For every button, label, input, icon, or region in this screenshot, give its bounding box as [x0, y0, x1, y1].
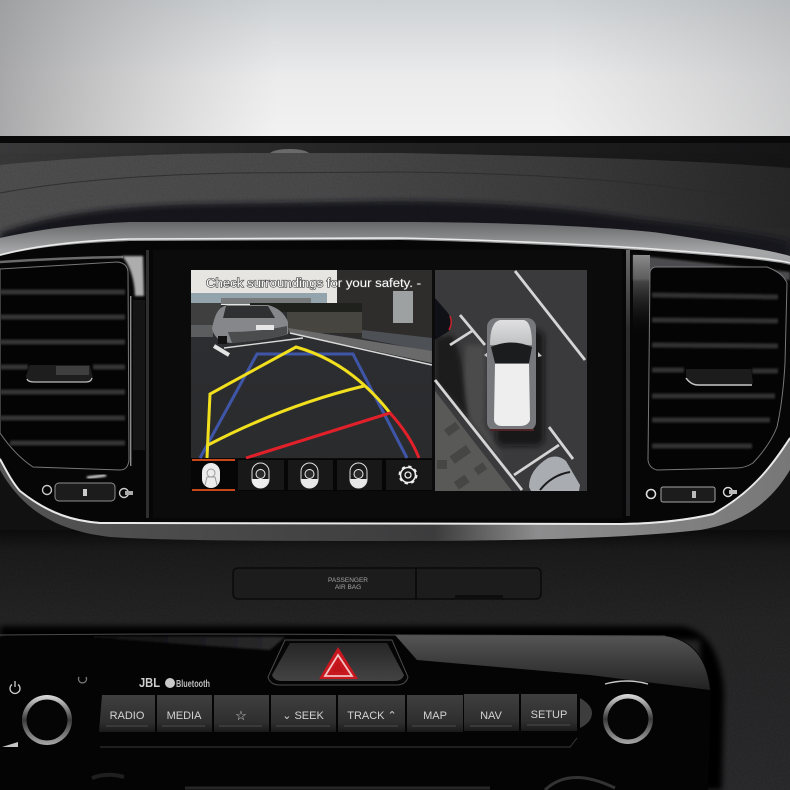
windshield: [0, 0, 790, 137]
NAV button: [464, 694, 519, 731]
hazard triangle: [319, 647, 358, 679]
screen message: Check surroundings for your safety. -: [206, 278, 421, 290]
TRACK button: [338, 695, 405, 732]
parked car: [212, 305, 288, 344]
right air vent: [626, 250, 790, 516]
MAP button: MAP: [423, 710, 447, 722]
screen: rear camera view: [191, 270, 432, 458]
tab 4: [337, 460, 382, 490]
brand labels: Bluetooth: [176, 679, 210, 690]
tab 3: [288, 460, 333, 490]
MEDIA button: MEDIA: [167, 710, 202, 722]
ground markings: [224, 338, 303, 348]
pavement: [435, 391, 512, 491]
airbag panel: [233, 568, 541, 599]
brand labels: JBL: [139, 675, 160, 690]
sky and building: [191, 270, 432, 365]
blue guide lines: [200, 354, 407, 458]
power icon: [10, 681, 20, 694]
tab 2: [238, 460, 284, 490]
selected tab: [192, 459, 235, 491]
lower dashboard: [0, 530, 790, 790]
parking lines: [435, 271, 585, 490]
center control stack: [0, 634, 711, 790]
shadow and kerb band: [435, 335, 470, 420]
left air vent: [0, 250, 149, 518]
side sliver: [580, 698, 592, 728]
chrome highlights: [0, 238, 790, 524]
dashboard top: [0, 136, 790, 270]
RADIO button: RADIO: [110, 710, 145, 722]
vent louvres: [0, 292, 125, 443]
yellow guide lines: [207, 347, 390, 458]
screen: overhead view: [435, 270, 587, 491]
chrome trim: [0, 222, 790, 541]
dark car, top left: [435, 298, 451, 340]
SEEK button: [271, 695, 336, 732]
vent slider: [42, 475, 133, 510]
white suv: [484, 318, 544, 446]
vent handle: [686, 369, 753, 386]
return icon: [79, 677, 86, 683]
volume wedge: [2, 742, 18, 747]
SETUP button: SETUP: [531, 709, 567, 721]
vent louvres: [652, 295, 778, 446]
NAV button: NAV: [480, 710, 503, 722]
TRACK button: TRACK ⌃: [347, 710, 397, 722]
SETUP button: [521, 694, 577, 731]
MAP button: [407, 695, 463, 732]
hazard button: [268, 640, 408, 685]
screen bezel: [153, 250, 622, 518]
red guide lines: [246, 413, 419, 458]
white car, bottom right: [529, 457, 580, 491]
lower controls hint: [92, 775, 615, 790]
radio buttons: [99, 694, 577, 732]
SEEK button: ⌄ SEEK: [282, 710, 324, 722]
brand labels: [139, 675, 210, 690]
airbag panel: AIR BAG: [335, 584, 361, 591]
knob direction arrow: [605, 681, 648, 684]
screen: camera mode icons: [191, 459, 432, 491]
left knob: [22, 695, 72, 745]
right knob: [603, 694, 653, 744]
airbag panel: PASSENGER: [328, 577, 368, 584]
MEDIA button: [157, 695, 212, 732]
vent handle: [26, 365, 93, 382]
vent surround panel: [0, 240, 790, 523]
favourite button: ☆: [235, 708, 247, 723]
vent slider: [646, 487, 737, 502]
favourite button: [214, 695, 269, 732]
settings gear: [386, 460, 432, 490]
RADIO button: [99, 695, 155, 732]
